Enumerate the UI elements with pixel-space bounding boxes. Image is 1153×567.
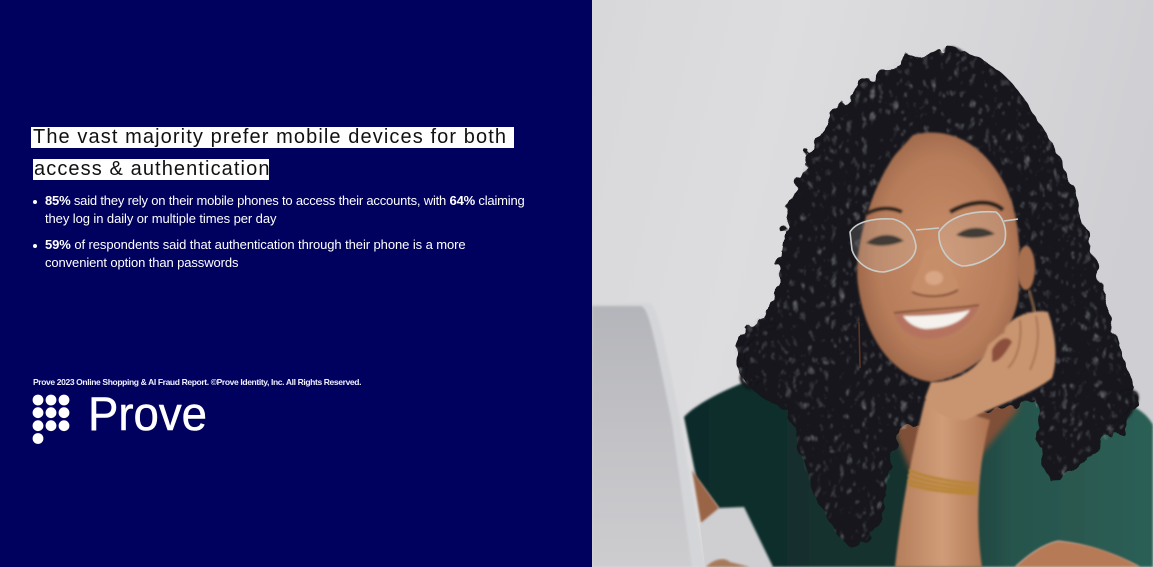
source note: Prove 2023 Online Shopping & AI Fraud Report. ©Prove Identity, Inc. All Rights Reserved. <box>33 377 361 387</box>
forearm and hand <box>895 311 1055 567</box>
finger shadow <box>992 338 1012 362</box>
eyebrow left <box>866 208 902 214</box>
heading line 2: access & authentication <box>34 158 271 180</box>
background wall <box>592 0 1153 567</box>
eye left <box>866 235 904 246</box>
ear <box>1017 246 1035 290</box>
wristband at lower edge <box>706 559 750 567</box>
bullet 2: convenient option than passwords <box>45 255 238 270</box>
nose <box>911 245 958 297</box>
loose curls <box>741 49 1137 428</box>
eye right <box>956 228 995 238</box>
shirt <box>684 382 1153 567</box>
bullet 2 <box>33 237 466 270</box>
eyebrow right <box>950 203 1003 212</box>
photo: smiling woman with glasses at a laptop <box>592 0 1153 567</box>
face <box>857 132 1020 382</box>
earring <box>1029 290 1035 312</box>
bullet 1: they log in daily or multiple times per day <box>45 211 276 226</box>
bullet 1: 85% said they rely on their mobile phones to access their accounts, with 64% claiming <box>45 193 525 208</box>
left arm behind laptop <box>692 470 719 523</box>
hair mass <box>725 45 1145 555</box>
neck <box>885 350 1020 470</box>
heading line 1: The vast majority prefer mobile devices for both <box>33 126 507 148</box>
bullet 2: 59% of respondents said that authentication through their phone is a more <box>45 237 466 252</box>
mouth <box>895 306 979 339</box>
lower wall behind arm <box>700 507 773 567</box>
laptop <box>592 303 705 567</box>
hair texture <box>725 45 1145 555</box>
teeth <box>903 310 970 329</box>
heading <box>31 126 514 180</box>
earring left <box>859 322 860 368</box>
bracelet <box>908 470 977 494</box>
logo: Prove <box>32 390 207 444</box>
bullet 1 <box>33 193 525 226</box>
right upper arm <box>1015 541 1140 567</box>
icon: dot grid <box>33 395 69 444</box>
glasses <box>850 212 1018 272</box>
bullet list <box>33 193 525 270</box>
